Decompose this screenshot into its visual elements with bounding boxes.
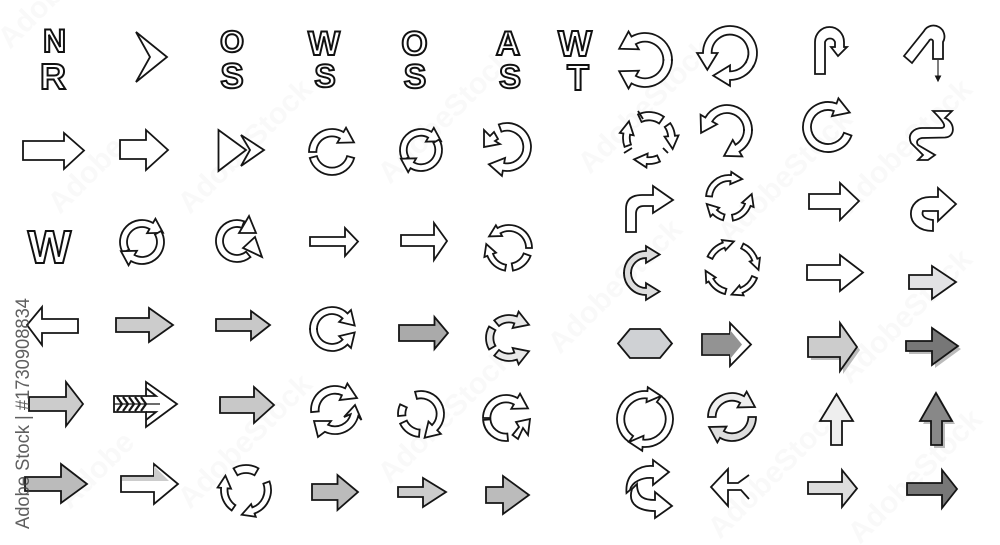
- letters: N R: [40, 23, 66, 97]
- icon: winding s arrow: [910, 111, 953, 160]
- arrow: hatched shaft: [114, 382, 177, 427]
- icon: hook arrow with thin pointer: [904, 26, 944, 81]
- watermark pattern: AdobeStock: [712, 103, 859, 250]
- arrow: dark fill with outline head: [702, 323, 751, 366]
- watermark pattern: Adobe: [42, 131, 131, 220]
- watermark pattern: AdobeStock: [172, 73, 319, 220]
- watermark pattern: AdobeStock: [172, 368, 319, 515]
- icon: three segment ring: [397, 386, 450, 438]
- letters: A S: [496, 25, 521, 95]
- letter: W large: W: [28, 221, 72, 273]
- icon: bent arrow: [626, 186, 673, 232]
- icon: ring with three heads: [309, 383, 362, 437]
- arrow: outline tall head: [401, 223, 447, 260]
- icon: thin refresh ring: [392, 121, 450, 179]
- arrow: mid gray row four: [399, 317, 448, 349]
- letters: A S: A: [496, 25, 520, 63]
- icon: ring with split arrow: [483, 394, 530, 443]
- arrow: gray slim row four: [216, 311, 270, 340]
- icon: open C two heads right: [310, 307, 355, 351]
- icon: two head ring, top right: [619, 31, 672, 89]
- icon: chevron arrowhead: [136, 32, 167, 82]
- arrow: gray slim row six: [398, 478, 446, 507]
- letters: W S: W: [308, 25, 341, 63]
- letters: W T: W: [558, 23, 592, 64]
- letters: W S: S: [314, 58, 336, 94]
- arrow: up dark with shadow: [920, 393, 955, 448]
- arrow: left pointing outline: [27, 307, 78, 345]
- watermark pattern: AdobeStock: [542, 213, 689, 360]
- icon: curved return arrow: [911, 188, 956, 231]
- icon: arch with two heads: [701, 105, 752, 156]
- arrow: gray short row six: [486, 476, 529, 514]
- icon: large C arrow: [796, 90, 862, 159]
- icon: shaded ring two heads: [708, 392, 756, 442]
- icon: gray C arrow with two heads: [624, 246, 660, 300]
- arrow: long outline row two: [23, 133, 84, 169]
- arrow: gray row six: [25, 464, 87, 503]
- icon: dashed four part ring: [617, 105, 683, 171]
- icon: split C with two heads: [479, 305, 529, 371]
- arrow: dark row six right: [907, 470, 957, 508]
- icon: ring with two arrows: [211, 458, 279, 521]
- letters: N R: R: [40, 56, 66, 97]
- icon: open ring arrow with two heads: [692, 15, 767, 91]
- watermark pattern: AdobeStock: [832, 243, 979, 390]
- arrow: short outline row two: [120, 130, 168, 170]
- arrow: slim outline: [310, 228, 358, 256]
- arrow: gray solid row five: [220, 387, 274, 423]
- letters: W T: T: [567, 57, 589, 98]
- arrow: gray row six third: [312, 475, 358, 510]
- letters: W T: [558, 23, 592, 98]
- arrow: dark with shadow: [906, 328, 961, 368]
- watermark pattern: AdobeStock: [702, 398, 849, 545]
- icon: two part ring with head: [307, 128, 354, 180]
- letters: O S second: O: [401, 25, 428, 63]
- arrow: light row six right: [808, 470, 857, 507]
- arrow: gray row five: [29, 382, 83, 426]
- arrow: up light: [820, 394, 853, 445]
- letters: N R: N: [43, 23, 66, 59]
- letters: A S: S: [499, 58, 521, 95]
- icon: hexagon: [618, 329, 672, 358]
- icon: double curved arrows: [626, 460, 672, 518]
- watermark pattern: AdobeStock: [372, 343, 519, 490]
- watermark pattern: AdobeStock: [832, 73, 979, 220]
- watermark pattern: AdobeStock: [372, 43, 519, 190]
- arrow: outline right column: [809, 183, 859, 220]
- arrow: gray with shadow: [808, 323, 860, 374]
- letters: O S: [220, 24, 244, 96]
- arrow: gray row four: [116, 308, 173, 342]
- letters: O S: S: [220, 57, 244, 96]
- letters: O S second: [401, 25, 428, 96]
- icon: four thin arrow ring: [701, 234, 766, 301]
- icon: three arrow ring: [704, 170, 756, 221]
- icon: circular ring with two heads: [216, 216, 262, 262]
- icon: fast forward double triangle: [218, 130, 264, 171]
- icon: left arrow with fork: [711, 469, 749, 506]
- icon: thin ring two heads: [606, 380, 684, 458]
- letters: O S: O: [220, 24, 244, 59]
- arrow: outline wide: [807, 255, 863, 291]
- letters: W S: [308, 25, 341, 94]
- icon: open ring with small arrow: [477, 116, 538, 179]
- arrow: light gray: [909, 266, 956, 299]
- icon: three part ring: [482, 225, 532, 275]
- letters: O S second: S: [404, 58, 426, 96]
- watermark pattern: AdobeStock: [572, 33, 719, 180]
- icon: refresh ring row three: [112, 211, 172, 273]
- vertical stock caption: Adobe Stock | #1730908834: [13, 298, 34, 529]
- icon: u-turn arrow: [815, 27, 847, 74]
- watermark pattern: Adobe: [52, 426, 141, 515]
- arrow: half shaded outline: [121, 464, 178, 504]
